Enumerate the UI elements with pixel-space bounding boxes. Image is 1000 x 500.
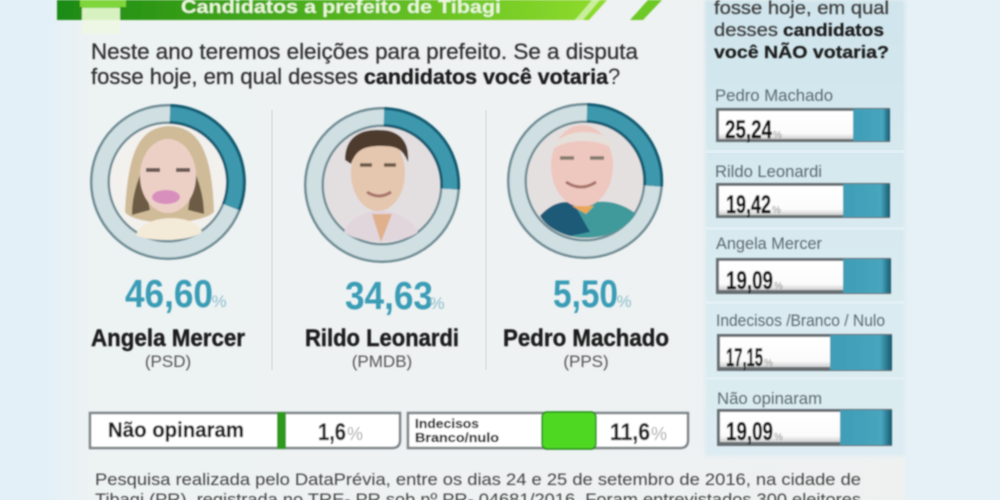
box: Indecisos Branco/nulo [408,412,688,449]
row: Não opinaram: 19,09 [726,418,773,446]
results: Angela Mercer: (PSD) [145,352,191,371]
results: Rildo Leonardi: (PMDB) [352,352,412,371]
box: Indecisos Branco/nulo: Branco/nulo [415,431,499,445]
photo [110,124,226,240]
row: Rildo Leonardi: Rildo Leonardi [715,162,822,181]
box: Indecisos Branco/nulo: 11,6 [610,419,650,446]
heading: main question [91,39,639,89]
row: Pedro Machado: 25,24 [725,116,772,144]
row: Indecisos / Branco / Nulo: Indecisos /Branco / Nulo [716,311,885,330]
ring chart [314,117,450,253]
sidebar question: candidatos [783,20,884,40]
sidebar question [714,0,889,62]
row: Não opinaram: % [774,432,783,443]
results: Angela Mercer [91,273,245,371]
heading: main question: Neste ano teremos eleições para prefeito. Se a disputa [91,39,639,64]
header accent slash [630,0,662,20]
header tab [80,0,126,20]
results: Rildo Leonardi: % [429,294,445,313]
photo [527,123,643,239]
panel: rejection sidebar [705,0,905,456]
box: Não opinaram [90,412,400,449]
panel: header banner [57,0,662,34]
photo [324,127,440,243]
row: Indecisos / Branco / Nulo: 17,15 [726,344,763,372]
box: Não opinaram: Não opinaram [108,419,244,442]
heading: main question: candidatos você votaria [364,66,608,89]
ring chart [517,113,653,249]
box: Não opinaram: 1,6 [318,419,346,446]
results: Rildo Leonardi [305,275,459,371]
results: Pedro Machado: Pedro Machado [503,325,669,352]
heading: main question: ? [608,64,620,89]
results: Rildo Leonardi: Rildo Leonardi [305,325,459,352]
row: Angela Mercer: % [774,281,783,292]
right margin band [905,0,1000,500]
header stripes [575,0,600,20]
row: Rildo Leonardi: 19,42 [726,191,771,219]
row: Indecisos / Branco / Nulo: % [764,358,773,369]
footnote [95,470,861,500]
row: Indecisos / Branco / Nulo [716,311,892,372]
row: Pedro Machado: Pedro Machado [715,86,833,105]
row: Não opinaram [717,389,892,446]
sidebar question: desses [714,20,778,40]
column dividers [271,110,487,370]
candidate: Pedro Machado [517,113,653,249]
box: Não opinaram: % [347,424,363,444]
candidate: Rildo Leonardi [314,117,450,253]
row: Não opinaram: Não opinaram [717,389,822,408]
sidebar question: você NÃO votaria? [714,41,889,62]
results: Pedro Machado [503,273,669,371]
row: Rildo Leonardi [715,162,890,219]
row: Angela Mercer: Angela Mercer [716,234,822,253]
candidate: Angela Mercer [100,114,236,250]
row: Pedro Machado [715,86,890,144]
results: Pedro Machado: % [616,292,632,311]
box: Indecisos Branco/nulo: Indecisos [415,417,479,431]
heading: main question: fosse hoje, em qual desses [91,64,358,89]
results: Angela Mercer: % [211,292,227,311]
results: Pedro Machado: 5,50 [553,273,618,316]
footnote: Pesquisa realizada pelo DataPrévia, entre os dias 24 e 25 de setembro de 2016, na cidade de [95,470,861,489]
row: Angela Mercer: 19,09 [726,267,773,295]
row: Angela Mercer [716,234,891,295]
row: Pedro Machado: % [773,130,782,141]
box: Indecisos Branco/nulo: % [651,424,667,444]
results: Angela Mercer: 46,60 [125,273,213,316]
results: Rildo Leonardi: 34,63 [345,275,433,318]
results: Angela Mercer: Angela Mercer [91,325,245,352]
ring chart [100,114,236,250]
results: Pedro Machado: (PPS) [563,352,609,371]
row: Rildo Leonardi: % [772,205,781,216]
row separators [705,150,905,380]
